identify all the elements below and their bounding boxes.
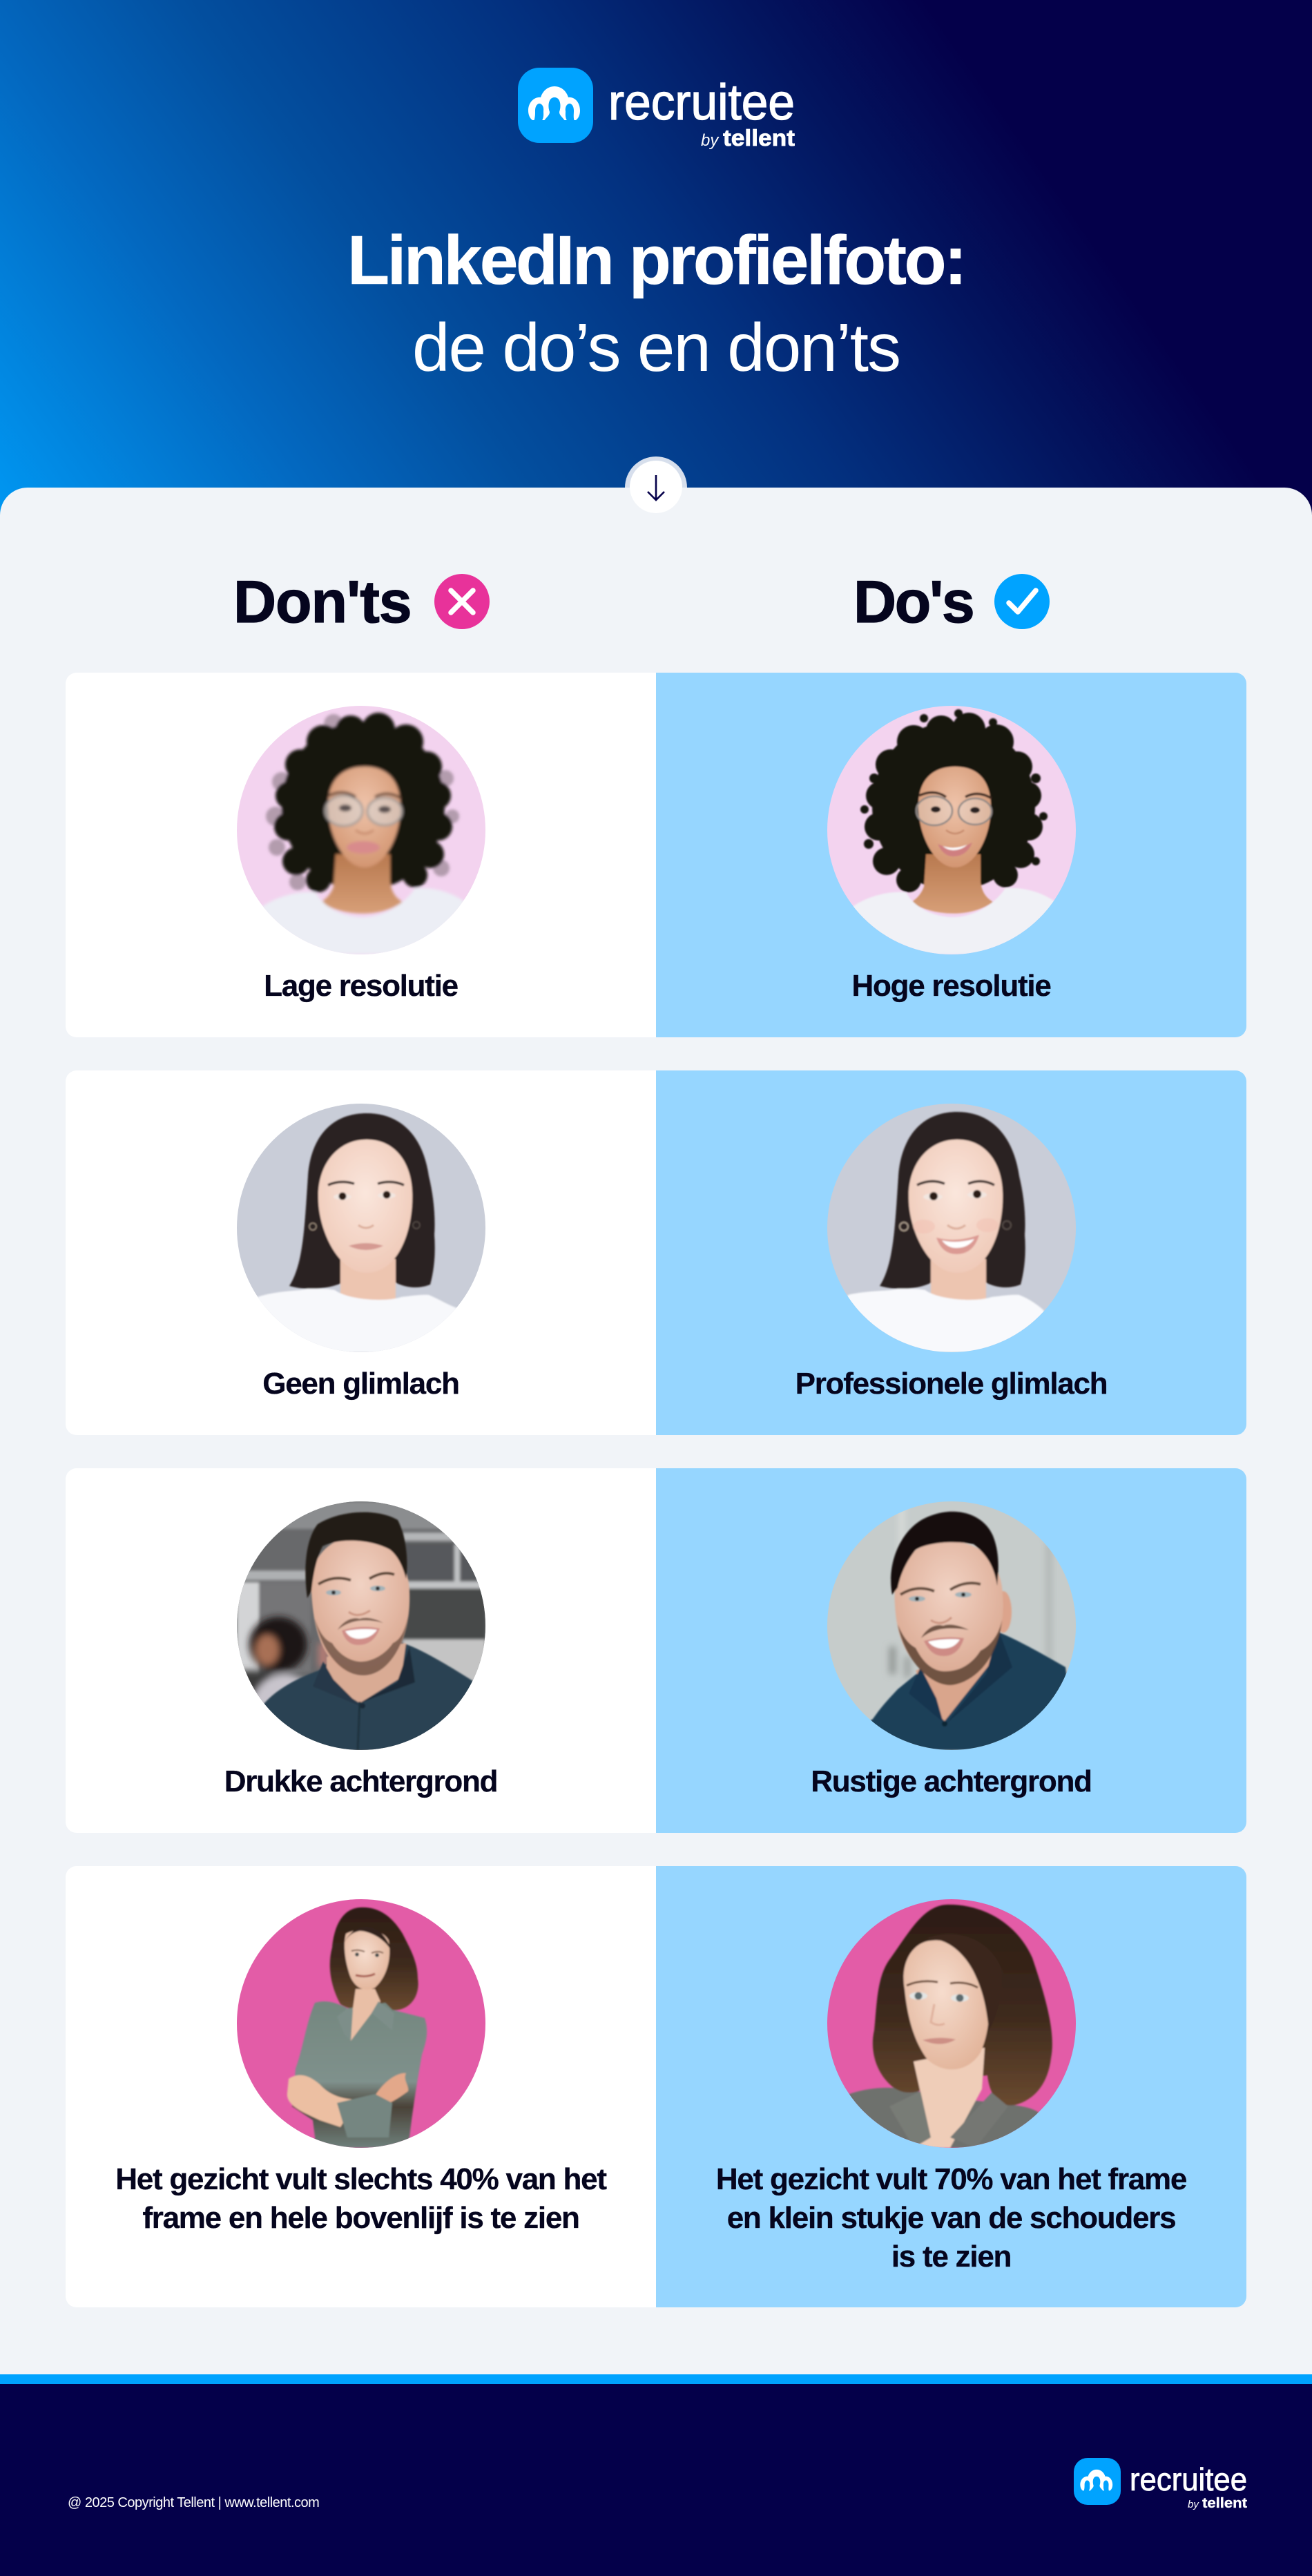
icon: blue check xyxy=(994,574,1050,629)
footer logo: recruitee xyxy=(1130,2461,1247,2497)
panel: content background xyxy=(0,488,1312,2374)
photo: woman upper body on pink xyxy=(237,1899,485,2148)
footer logo xyxy=(1074,2458,1247,2511)
photo: portrait with smile xyxy=(827,1104,1076,1352)
label: Het gezicht vult 70% van het frame xyxy=(716,2162,1186,2196)
label: Hoge resolutie xyxy=(851,969,1051,1003)
icon: pink cross xyxy=(434,574,490,629)
footer background xyxy=(0,2384,1312,2576)
logo: recruitee by tellent: recruitee xyxy=(608,75,795,131)
footer copyright: @ 2025 Copyright Tellent | www.tellent.com xyxy=(68,2495,319,2510)
label: Professionele glimlach xyxy=(795,1367,1107,1401)
footer logo: by xyxy=(1188,2499,1199,2510)
header gradient background xyxy=(0,0,1312,525)
panel: do calm background xyxy=(656,1468,1246,1833)
label: en klein stukje van de schouders xyxy=(727,2201,1175,2235)
panel: don't no smile xyxy=(66,1070,656,1435)
footer logo: tellent xyxy=(1202,2496,1247,2511)
label xyxy=(716,2162,1186,2274)
footer band xyxy=(0,2374,1312,2384)
label: Drukke achtergrond xyxy=(224,1765,497,1798)
label: is te zien xyxy=(891,2240,1011,2274)
label: frame en hele bovenlijf is te zien xyxy=(142,2201,579,2235)
icon: down arrow button xyxy=(625,456,687,513)
logo: recruitee by tellent: by xyxy=(701,131,720,150)
panel: don't face 40 percent xyxy=(66,1866,656,2307)
photo: man with busy office background xyxy=(237,1501,485,1750)
panel: do face 70 percent xyxy=(656,1866,1246,2307)
label: Geen glimlach xyxy=(262,1367,459,1401)
panel: do high resolution xyxy=(656,673,1246,1037)
photo: man with calm background xyxy=(827,1501,1076,1750)
label xyxy=(115,2162,607,2235)
logo: recruitee by tellent: tellent xyxy=(723,125,795,151)
heading: Do's: Do's xyxy=(853,569,973,635)
label: Rustige achtergrond xyxy=(811,1765,1092,1798)
label: Lage resolutie xyxy=(264,969,458,1003)
photo: portrait without smile xyxy=(237,1104,485,1352)
photo: low resolution portrait xyxy=(237,706,485,954)
title: LinkedIn profielfoto: xyxy=(347,222,965,299)
label: Het gezicht vult slechts 40% van het xyxy=(115,2162,606,2196)
panel: don't busy background xyxy=(66,1468,656,1833)
panel: do professional smile xyxy=(656,1070,1246,1435)
photo: high resolution portrait xyxy=(827,706,1076,954)
subtitle: de do’s en don’ts xyxy=(412,309,900,385)
panel: don't low resolution xyxy=(66,673,656,1037)
heading: Don'ts: Don'ts xyxy=(233,569,412,635)
logo: recruitee by tellent xyxy=(518,68,795,151)
photo: woman face closeup on pink xyxy=(827,1899,1076,2148)
